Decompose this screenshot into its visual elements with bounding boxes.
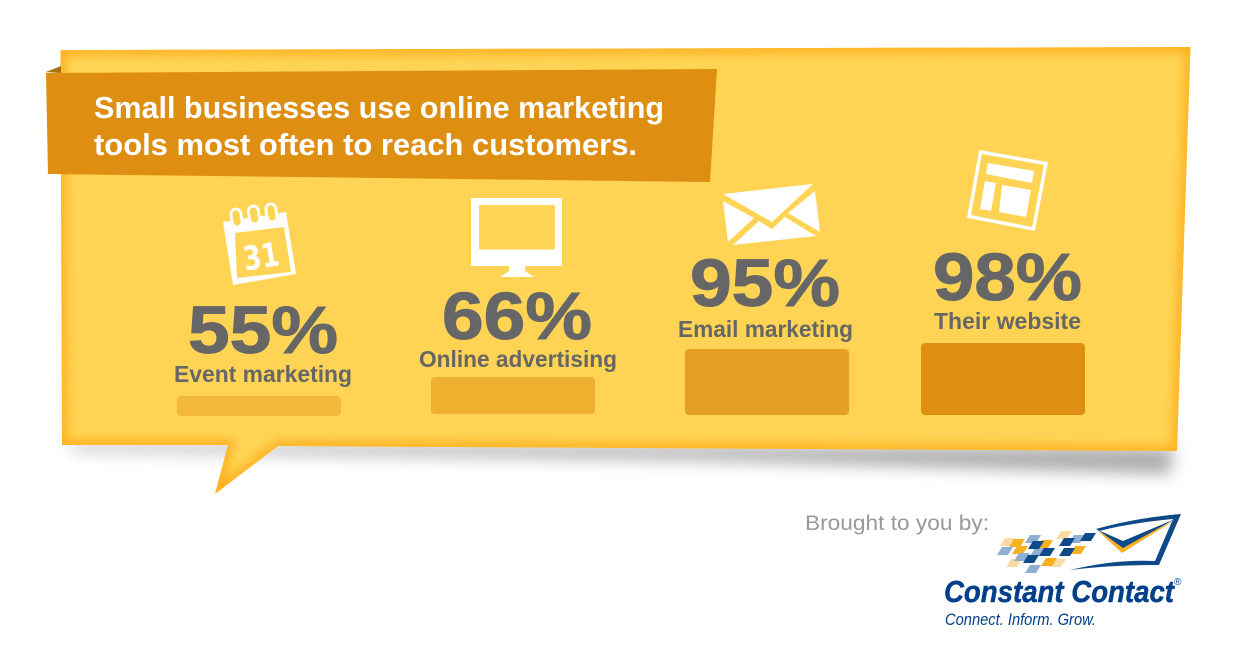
heading text: Small businesses use online marketing — [94, 90, 664, 125]
speech bubble panel — [60, 47, 1190, 494]
stat: email marketing — [678, 184, 853, 415]
value: 55%: 55% — [188, 293, 338, 368]
logo wordmark: Constant Contact — [944, 574, 1175, 609]
icon: calendar — [223, 203, 296, 285]
value: 66%: 66% — [442, 279, 592, 354]
logo: Constant Contact — [944, 514, 1182, 629]
attribution text: Brought to you by: — [805, 512, 989, 535]
label: their website: Their website — [934, 308, 1081, 334]
stat: their website — [921, 152, 1085, 415]
heading text — [94, 90, 664, 162]
bar: 95% — [685, 349, 849, 415]
logo tagline: Connect. Inform. Grow. — [945, 610, 1096, 629]
bar: 55% — [177, 396, 341, 416]
bar: 66% — [431, 377, 595, 414]
icon: monitor — [471, 198, 562, 277]
logo mark: squares — [997, 531, 1096, 573]
registered mark: ® — [1174, 577, 1182, 588]
label: online advertising: Online advertising — [419, 346, 617, 372]
icon: envelope — [723, 184, 820, 245]
label: email marketing: Email marketing — [678, 316, 853, 342]
stat: online advertising — [419, 198, 617, 414]
bubble shadow — [72, 444, 1174, 474]
value: 95%: 95% — [690, 246, 840, 321]
logo mark: envelope — [1070, 514, 1181, 570]
icon: calendar: 31 — [240, 234, 282, 279]
label: event marketing: Event marketing — [174, 361, 352, 387]
heading text: tools most often to reach customers. — [94, 127, 637, 162]
bar: 98% — [921, 343, 1085, 415]
stat: event marketing — [174, 203, 352, 416]
value: 98%: 98% — [933, 240, 1082, 315]
heading ribbon — [46, 66, 717, 182]
icon: web page — [969, 152, 1046, 229]
